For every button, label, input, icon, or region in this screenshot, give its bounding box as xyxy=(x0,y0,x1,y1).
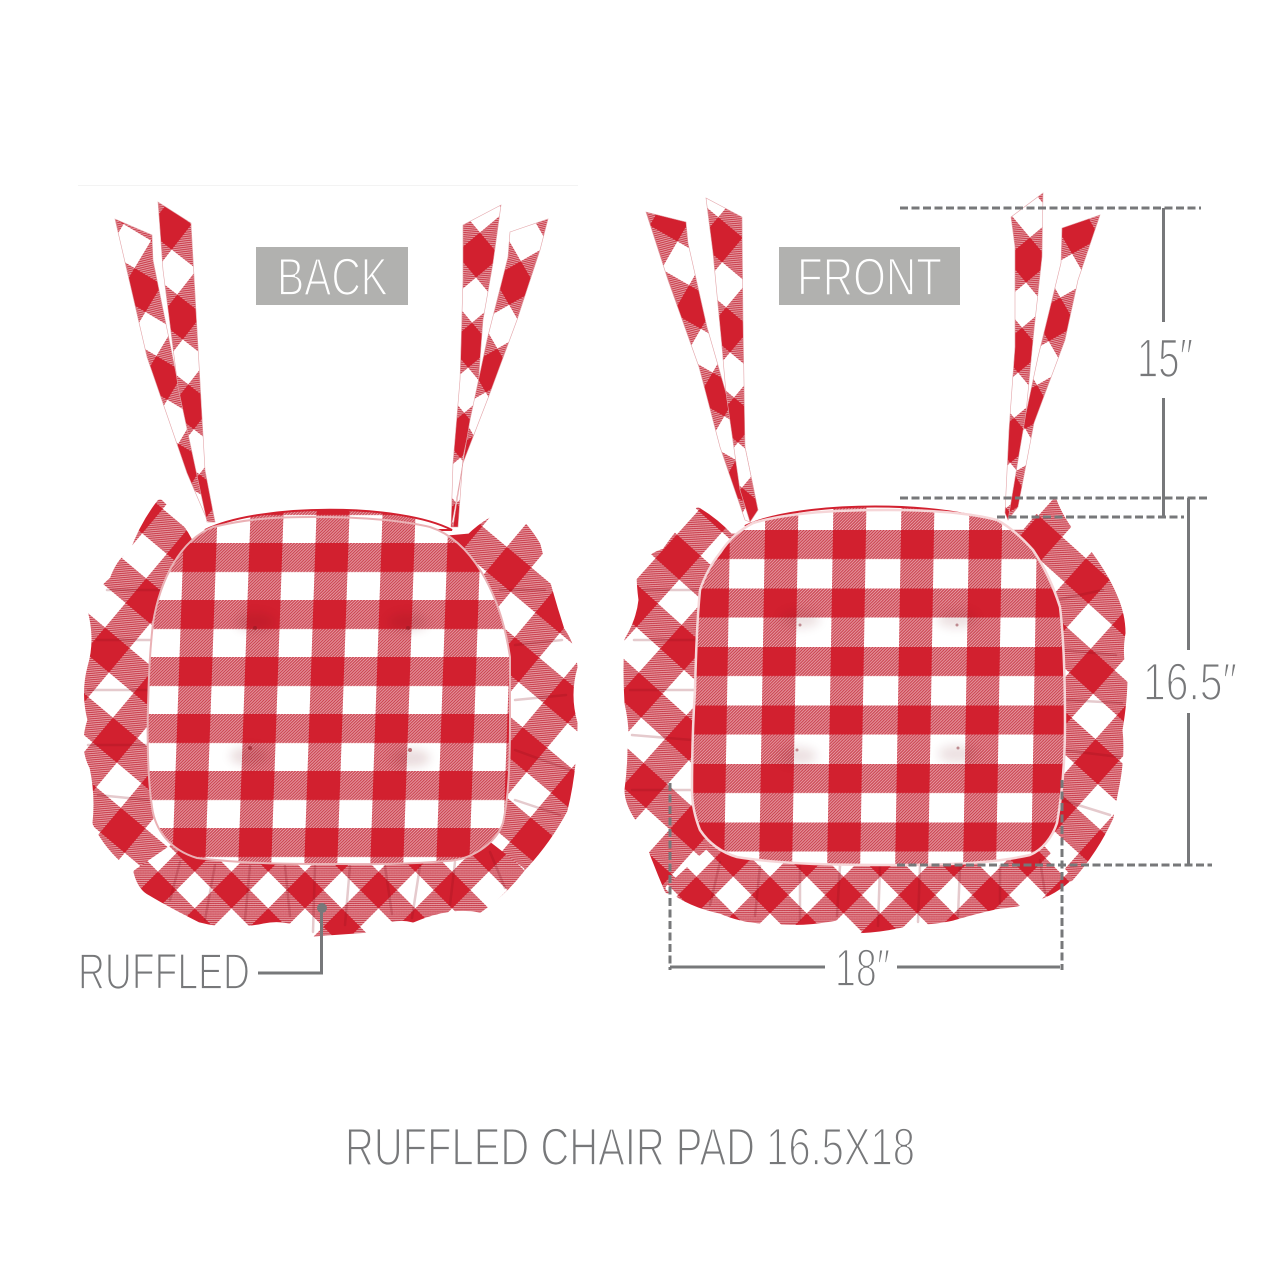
label: back: BACK xyxy=(277,248,388,307)
back ties, left pair xyxy=(115,202,215,522)
callout: ruffled: RUFFLED xyxy=(78,943,250,1000)
dimension: tie length 15 inches: 15″ xyxy=(1137,327,1193,389)
back cushion tufts xyxy=(230,613,430,767)
front cushion tufts xyxy=(777,610,978,765)
front ruffle xyxy=(627,500,1124,931)
dimension: width 18 inches: 18″ xyxy=(835,939,890,998)
panel: front view of chair pad xyxy=(627,193,1124,931)
title: RUFFLED CHAIR PAD 16.5X18 xyxy=(345,1118,915,1177)
dimension: height 16.5 inches: 16.5″ xyxy=(1143,653,1237,712)
panel: back view of chair pad xyxy=(87,202,574,934)
front ties, left pair xyxy=(646,198,758,522)
back ties, right pair xyxy=(451,205,548,527)
front piping strip xyxy=(745,506,1005,526)
label: front: FRONT xyxy=(797,248,942,307)
front ties, right pair xyxy=(1005,193,1100,520)
back cushion xyxy=(148,517,510,864)
back piping strip xyxy=(205,510,452,530)
callout: ruffled xyxy=(78,903,327,1000)
front cushion xyxy=(692,510,1065,865)
back ruffle xyxy=(87,503,574,934)
